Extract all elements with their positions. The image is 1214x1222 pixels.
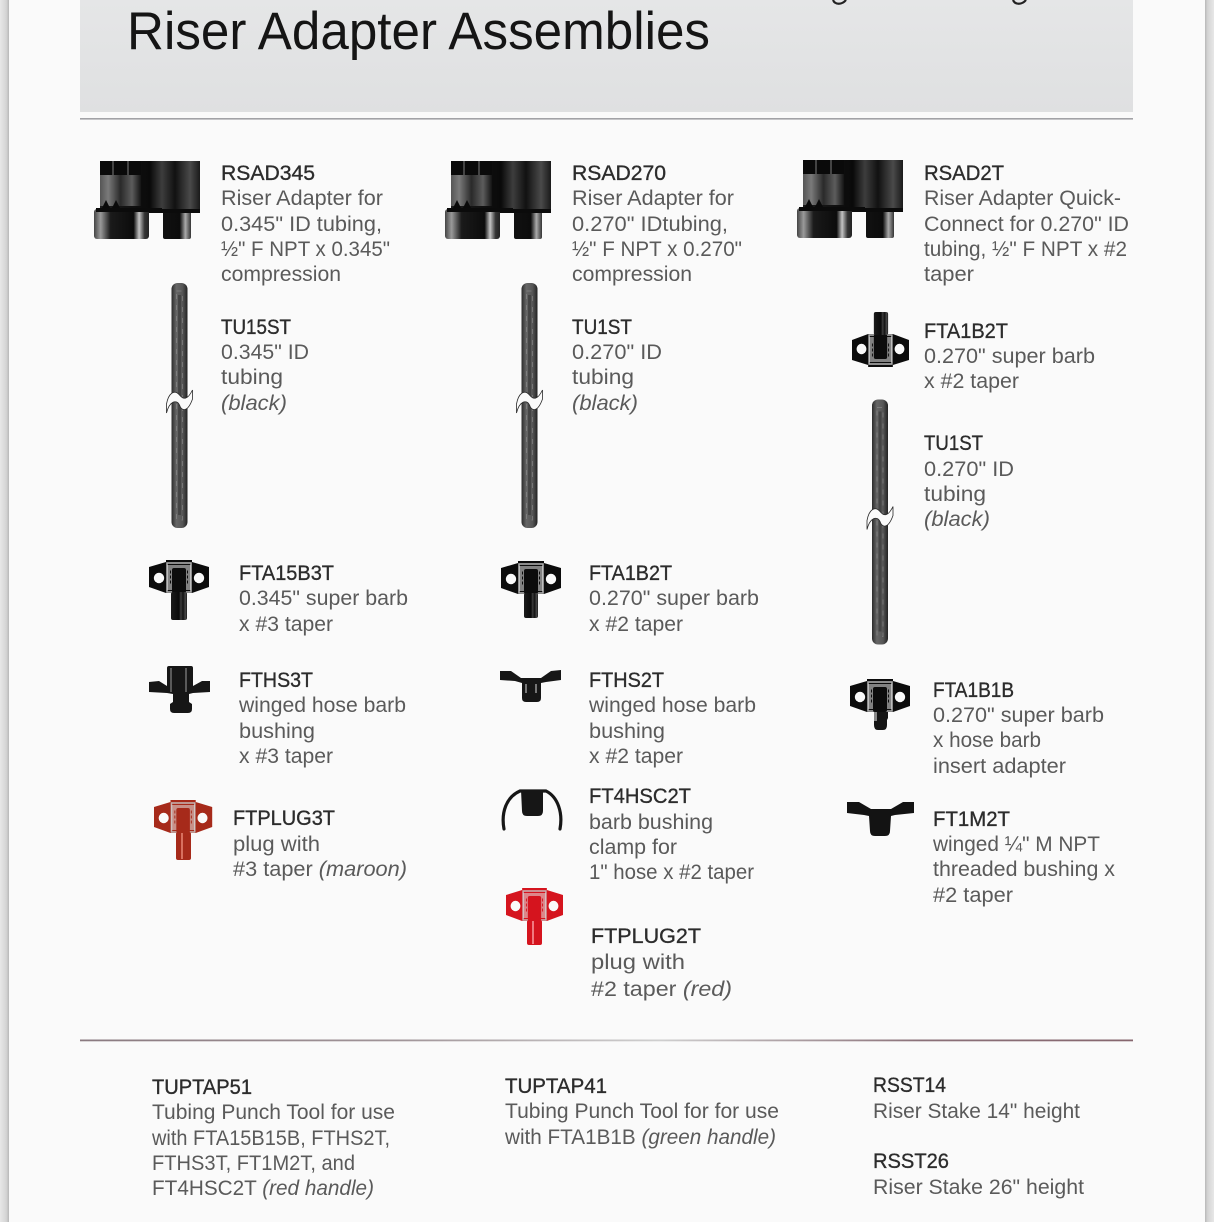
text: RSAD270: Riser Adapter for [572, 187, 734, 210]
text: FTHS3T: x #3 taper [239, 745, 333, 768]
icon: tubing TU1ST [516, 283, 542, 528]
text: FT4HSC2T: 1" hose x #2 taper [589, 861, 754, 884]
text: FT4HSC2T: barb bushing [589, 811, 713, 834]
text: RSAD270: ½" F NPT x 0.270" [572, 238, 742, 261]
text: FTHS3T: FTHS3T [239, 669, 313, 692]
text: FTPLUG2T: plug with [591, 951, 685, 974]
text: RSAD270: 0.270" IDtubing, [572, 213, 728, 236]
text: RSAD2T: Riser Adapter Quick- [924, 187, 1121, 210]
text: FTHS2T: x #2 taper [589, 745, 683, 768]
text: RSST26: RSST26 [873, 1150, 949, 1173]
text: FTHS2T: bushing [589, 720, 665, 743]
text: FTA15B3T: FTA15B3T [239, 562, 334, 585]
text: FTHS2T: FTHS2T [589, 669, 664, 692]
text: FTA1B1B: x hose barb [933, 729, 1041, 752]
icon: tubing TU15ST [166, 283, 192, 528]
text: FTA1B2T: FTA1B2T [589, 562, 672, 585]
text: FTPLUG2T [591, 925, 732, 1001]
text: TU1ST [572, 316, 662, 415]
text: FTA15B3T: x #3 taper [239, 613, 333, 636]
text: FTA1B1B: FTA1B1B [933, 679, 1014, 702]
icon: riser adapter RSAD2T [797, 160, 903, 238]
text: RSAD2T [924, 162, 1129, 286]
panel: 0.345 inch column [94, 161, 408, 881]
text: RSAD270: RSAD270 [572, 162, 666, 185]
text: TU15ST: 0.345" ID [221, 341, 309, 364]
text: RSST26 [873, 1150, 1084, 1199]
text: TU1ST: 0.270" ID [924, 458, 1014, 481]
text: FT1M2T [932, 808, 1116, 907]
icon: red plug FTPLUG2T [506, 888, 563, 945]
text: RSST14: Riser Stake 14" height [873, 1100, 1080, 1123]
text: FTA15B3T [239, 562, 408, 636]
text: TU1ST: tubing [572, 366, 634, 389]
text: FT1M2T: FT1M2T [933, 808, 1010, 831]
icon: barb FTA15B3T [149, 560, 209, 620]
text: RSST26: Riser Stake 26" height [873, 1176, 1084, 1199]
text: RSAD345: RSAD345 [221, 162, 315, 185]
text: TU15ST [221, 316, 309, 415]
text: TUPTAP41: TUPTAP41 [505, 1075, 607, 1098]
text: FTPLUG3T: #3 taper (maroon) [233, 858, 407, 881]
text: FTA1B2T: 0.270" super barb [589, 587, 759, 610]
text: FTHS2T: winged hose barb [588, 694, 756, 717]
icon: barb bushing clamp FT4HSC2T [503, 790, 561, 829]
text: FTA1B2T [924, 320, 1095, 393]
text: TUPTAP51: Tubing Punch Tool for use [152, 1101, 395, 1124]
text: TUPTAP51: TUPTAP51 [152, 1076, 252, 1099]
text: RSAD270 [572, 162, 742, 286]
text: FTA1B2T: x #2 taper [924, 370, 1019, 393]
text: FTA1B2T: 0.270" super barb [924, 345, 1095, 368]
text: TU1ST: (black) [572, 392, 638, 415]
text: FT4HSC2T: FT4HSC2T [589, 785, 691, 808]
text: TU1ST: 0.270" ID [572, 341, 662, 364]
text: TUPTAP41: with FTA1B1B (green handle) [504, 1126, 776, 1149]
text: RSAD345: 0.345" ID tubing, [221, 213, 382, 236]
text: RSAD345: compression [221, 263, 341, 286]
icon: riser adapter RSAD345 [94, 161, 200, 239]
text: FT4HSC2T [589, 785, 754, 884]
text: FTA1B2T: x #2 taper [589, 613, 683, 636]
icon: barb FTA1B2T [501, 561, 561, 618]
text: FTA1B2T [589, 562, 759, 636]
text: FTHS3T: winged hose barb [238, 694, 406, 717]
text: TUPTAP51: with FTA15B15B, FTHS2T, [151, 1127, 390, 1150]
text: FTPLUG3T [233, 807, 407, 881]
panel: 0.270 inch column [445, 161, 759, 1001]
text: TUPTAP51 [151, 1076, 395, 1200]
text: TU1ST [924, 432, 1014, 531]
text: FT1M2T: #2 taper [933, 884, 1013, 907]
text: FTPLUG3T: FTPLUG3T [233, 807, 335, 830]
text: RSAD345: ½" F NPT x 0.345" [221, 238, 390, 261]
icon: tubing TU1ST [867, 400, 893, 644]
text: FTA15B3T: 0.345" super barb [239, 587, 408, 610]
text: TUPTAP51: FTHS3T, FT1M2T, and [152, 1152, 355, 1175]
header band [80, 0, 1133, 112]
text: FTA1B1B [933, 679, 1104, 778]
text: TU1ST: TU1ST [924, 432, 983, 455]
text: FT1M2T: winged ¼" M NPT [932, 833, 1100, 856]
text: TU15ST: tubing [221, 366, 283, 389]
text: RSAD2T: Connect for 0.270" ID [924, 213, 1129, 236]
text: RSAD345 [221, 162, 390, 286]
title: Riser Adapter Assemblies [127, 2, 710, 61]
icon: maroon plug FTPLUG3T [154, 800, 212, 860]
icon: winged bushing FTHS2T [500, 670, 561, 702]
text: FTHS3T [238, 669, 406, 768]
text: FTA1B1B: 0.270" super barb [933, 704, 1104, 727]
text: FTA1B2T: FTA1B2T [924, 320, 1008, 343]
icon: barb FTA1B2T inverted [852, 312, 909, 367]
text: FTHS2T [588, 669, 756, 768]
text: TUPTAP41 [504, 1075, 779, 1149]
text: RSAD270: compression [572, 263, 692, 286]
text: FTPLUG3T: plug with [233, 833, 320, 856]
icon: riser adapter RSAD270 [445, 161, 551, 239]
text: TU1ST: (black) [924, 508, 990, 531]
panel: quick-connect column [797, 160, 1129, 907]
text: FTPLUG2T: FTPLUG2T [591, 925, 701, 948]
icon: winged threaded bushing FT1M2T [847, 802, 914, 836]
text: FT4HSC2T: clamp for [589, 836, 677, 859]
text: RSST14: RSST14 [873, 1074, 946, 1097]
text: RSAD345: Riser Adapter for [221, 187, 383, 210]
text: RSAD2T: tubing, ½" F NPT x #2 [924, 238, 1127, 261]
text: TUPTAP41: Tubing Punch Tool for for use [505, 1100, 779, 1123]
text: RSAD2T: taper [924, 263, 974, 286]
icon: winged bushing FTHS3T [149, 666, 210, 713]
text: FTA1B1B: insert adapter [933, 755, 1066, 778]
text: TU15ST: (black) [221, 392, 287, 415]
text: FTHS3T: bushing [239, 720, 315, 743]
text: FT1M2T: threaded bushing x [933, 858, 1116, 881]
text: FTPLUG2T: #2 taper (red) [591, 978, 732, 1001]
icon: hose barb adapter FTA1B1B [850, 679, 910, 730]
text: RSST14 [873, 1074, 1080, 1123]
text: TU1ST: TU1ST [572, 316, 632, 339]
text: TU15ST: TU15ST [221, 316, 291, 339]
panel: tools and stakes [151, 1074, 1084, 1200]
text: RSAD2T: RSAD2T [924, 162, 1004, 185]
text: TU1ST: tubing [924, 483, 986, 506]
text: TUPTAP51: FT4HSC2T (red handle) [152, 1177, 374, 1200]
